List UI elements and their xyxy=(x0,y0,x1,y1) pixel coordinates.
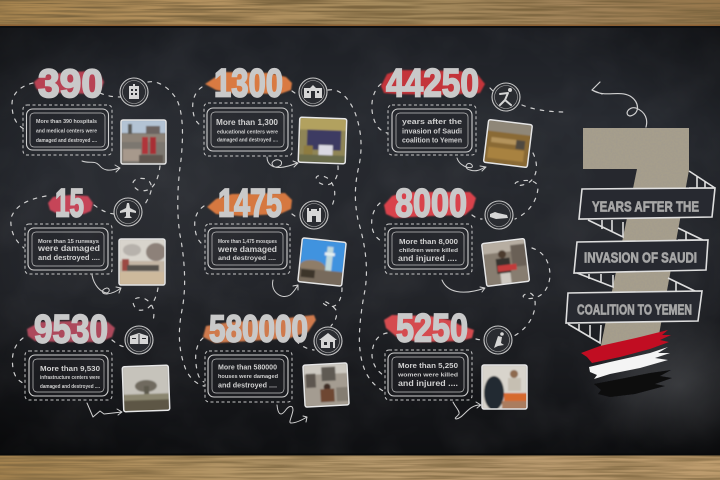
icon: school xyxy=(299,78,327,106)
text box: More than 1,475 mosques xyxy=(218,239,277,245)
ribbon: line two xyxy=(574,240,708,273)
number: 5250 xyxy=(396,306,468,350)
paint splash xyxy=(203,315,316,343)
text box: and medical centers were xyxy=(36,128,97,134)
photo: students xyxy=(298,117,347,164)
text box: More than 9,530 xyxy=(40,364,100,373)
icon: running person xyxy=(492,83,520,111)
panel: women xyxy=(384,306,527,419)
dashed chalk connectors xyxy=(11,82,566,392)
text box xyxy=(205,351,292,402)
icon: infrastructure xyxy=(125,326,153,354)
text box: More than 8,000 xyxy=(399,239,458,246)
text box: houses were damaged xyxy=(218,374,278,380)
paint splash xyxy=(48,195,93,214)
text box xyxy=(385,224,472,274)
text box: More than 1,300 xyxy=(216,117,278,127)
bottom wooden frame xyxy=(0,454,720,480)
number: 390 xyxy=(38,62,103,106)
photo: airport smoke xyxy=(119,239,166,285)
photo: women in clinic xyxy=(482,365,527,410)
text box: children were killed xyxy=(399,248,458,254)
icon: children xyxy=(485,201,513,229)
paint splash xyxy=(34,71,104,94)
arrow xyxy=(273,280,298,297)
text box: and injured .... xyxy=(398,254,457,263)
panel: runways xyxy=(25,182,166,294)
ribbon: line one xyxy=(579,188,715,219)
icon: house xyxy=(314,327,342,355)
text box: coalition to Yemen xyxy=(402,138,462,144)
panel: infrastructure xyxy=(25,308,170,417)
paint splash xyxy=(381,70,485,95)
icon: hospital xyxy=(120,78,148,106)
text box xyxy=(205,224,290,274)
text box xyxy=(23,105,112,155)
text box: and destroyed .... xyxy=(218,255,276,262)
arrow xyxy=(277,405,307,423)
ribbon folds xyxy=(568,171,715,343)
text box: infrastructure centers were xyxy=(40,375,100,381)
text box: More than 580000 xyxy=(218,364,277,372)
text box: and destroyed .... xyxy=(38,255,100,262)
text box: More than 15 runways xyxy=(38,239,99,245)
top wooden frame xyxy=(0,0,720,28)
text box: educational centers were xyxy=(217,130,278,136)
text box: damaged and destroyed .... xyxy=(36,138,97,144)
number: 1475 xyxy=(218,182,282,226)
text box: and injured .... xyxy=(398,379,458,388)
title block: seven with ribbons xyxy=(566,128,715,397)
text box: years after the xyxy=(402,117,462,126)
panel: duration xyxy=(381,62,532,171)
text box xyxy=(385,350,472,400)
photo: hospital ruins xyxy=(121,120,166,164)
numeral seven xyxy=(583,128,689,350)
number: 15 xyxy=(55,182,84,226)
curly chalk arrow xyxy=(592,82,647,127)
panel: schools xyxy=(204,62,347,168)
text box: were damaged xyxy=(37,244,100,253)
text box: and destroyed .... xyxy=(218,380,277,390)
panel: houses xyxy=(203,308,349,423)
paint splash xyxy=(205,72,292,94)
text box: More than 5,250 xyxy=(398,363,458,370)
Yemen flag brush strokes xyxy=(581,330,672,397)
ribbon: line three xyxy=(566,291,702,323)
arrow xyxy=(87,403,122,417)
arrow xyxy=(92,275,121,294)
photo: airstrike smoke xyxy=(122,365,170,412)
paint splash xyxy=(384,315,474,342)
photo: man in rubble xyxy=(303,363,349,407)
arrow xyxy=(82,161,120,172)
icon: mosque xyxy=(300,201,328,229)
text box xyxy=(388,105,476,155)
paint splash xyxy=(27,321,115,342)
text box: damaged and destroyed .... xyxy=(40,384,100,390)
icon: plane on runway xyxy=(114,198,142,226)
number: 9530 xyxy=(34,308,108,352)
photo: man carrying child xyxy=(482,238,530,286)
panel: children xyxy=(384,182,530,292)
number: 580000 xyxy=(209,308,308,350)
text box: women were killed xyxy=(397,372,459,378)
text box xyxy=(204,103,292,156)
paint splash xyxy=(384,192,476,218)
number: 44250 xyxy=(386,62,479,106)
text box xyxy=(25,351,112,400)
panel: mosques xyxy=(205,182,346,297)
arrow xyxy=(453,402,481,419)
text box xyxy=(25,224,112,274)
panel: hospitals xyxy=(23,62,166,172)
photo: minaret xyxy=(298,238,346,286)
photo: graves xyxy=(483,119,532,168)
arrow xyxy=(442,280,485,292)
number: 8000 xyxy=(395,182,467,226)
arrow xyxy=(457,158,486,171)
arrow xyxy=(267,157,298,168)
icon: woman xyxy=(484,326,512,354)
number: 1300 xyxy=(214,62,283,106)
paint splash xyxy=(207,193,292,216)
text box: More than 390 hospitals xyxy=(36,119,97,125)
text box: damaged and destroyed .... xyxy=(217,138,278,144)
text box: invasion of Saudi xyxy=(402,126,462,136)
text box: were damaged xyxy=(217,245,277,254)
